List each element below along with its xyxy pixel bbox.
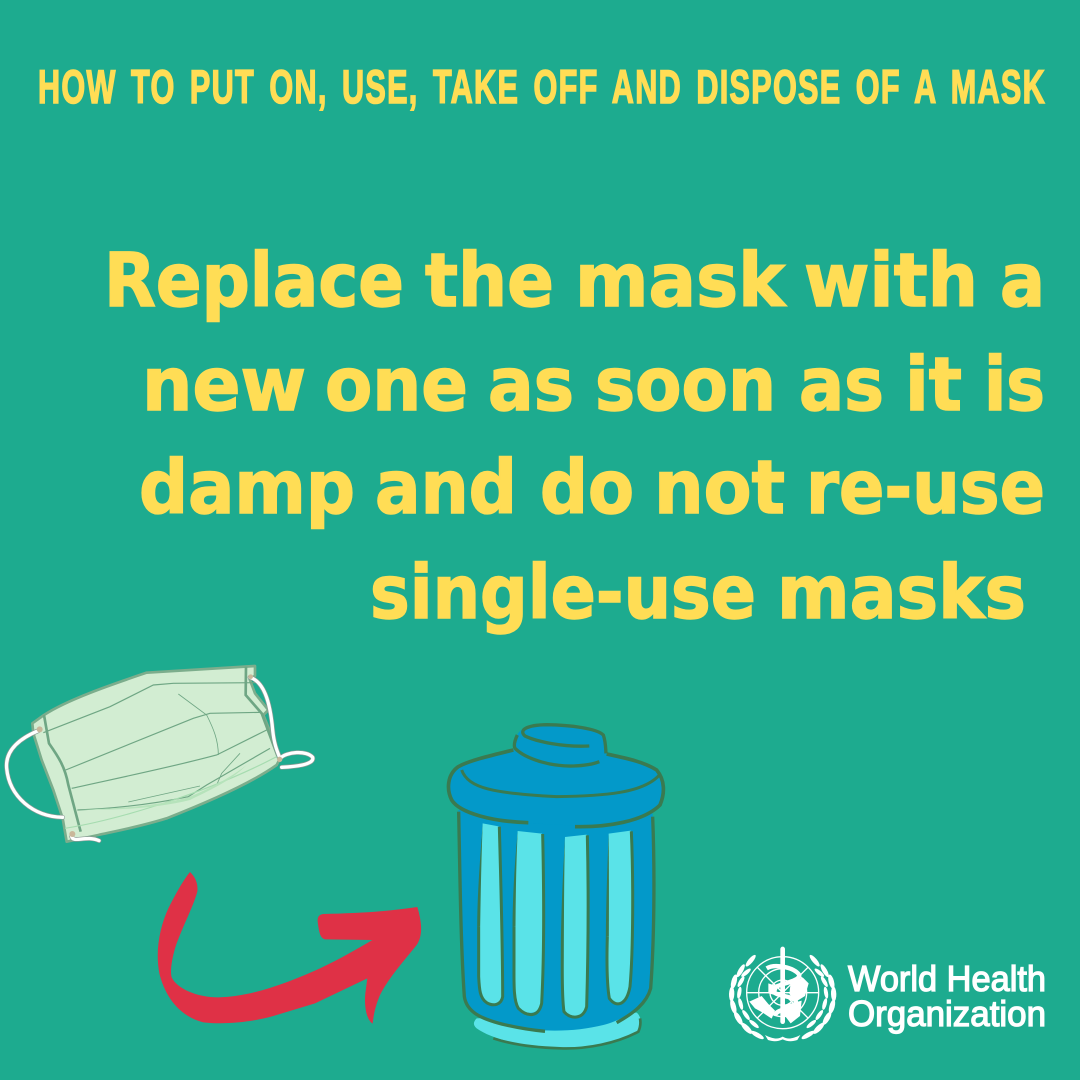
left laurel branch [729,954,765,1041]
main message: soon [595,342,776,428]
arrow: red arrow to bin [158,872,421,1024]
main message [104,238,1045,636]
bin base [474,1013,641,1048]
mask loop knots [37,674,282,837]
main message: masks [777,550,1026,636]
main message: a [1000,238,1045,324]
emblem laurel wreath [729,954,837,1041]
main message: one [325,342,468,428]
bin slot tapered edges [477,824,609,950]
main message: and [375,445,517,531]
mask body [32,666,281,842]
main message: single-use [370,550,756,636]
logo wordmark [848,958,1046,1034]
icon: surgical mask [7,666,313,842]
icon: trash bin [448,724,663,1048]
logo wordmark: World Health [848,958,1046,999]
main message: mask [575,238,787,324]
logo wordmark: Organization [848,993,1046,1034]
main message: it [905,342,962,428]
mask ear loops [7,677,313,841]
bin slots [479,823,632,1016]
main message: re-use [806,445,1045,531]
bin body [458,810,654,1031]
emblem globe [747,957,819,1029]
logo emblem [729,947,837,1041]
main message: as [799,342,884,428]
right laurel branch [800,954,837,1041]
bin slot outlines [479,827,633,1017]
emblem continents [749,977,809,1023]
main message: damp [139,445,355,531]
emblem staff and snake [780,947,785,1024]
mask pleats and seams [43,667,278,832]
main message: as [488,342,574,428]
emblem wreath ribbon [765,1035,800,1041]
main message: do [540,445,634,531]
main message: the [425,238,554,324]
main message: new [142,342,306,428]
main message: Replace [104,238,404,324]
bin lid handle [514,725,606,766]
bin lid [448,724,663,827]
main message: not [654,445,785,531]
main message: with [804,238,978,324]
logo: World Health Organization [729,947,1046,1041]
main message: is [984,342,1045,428]
